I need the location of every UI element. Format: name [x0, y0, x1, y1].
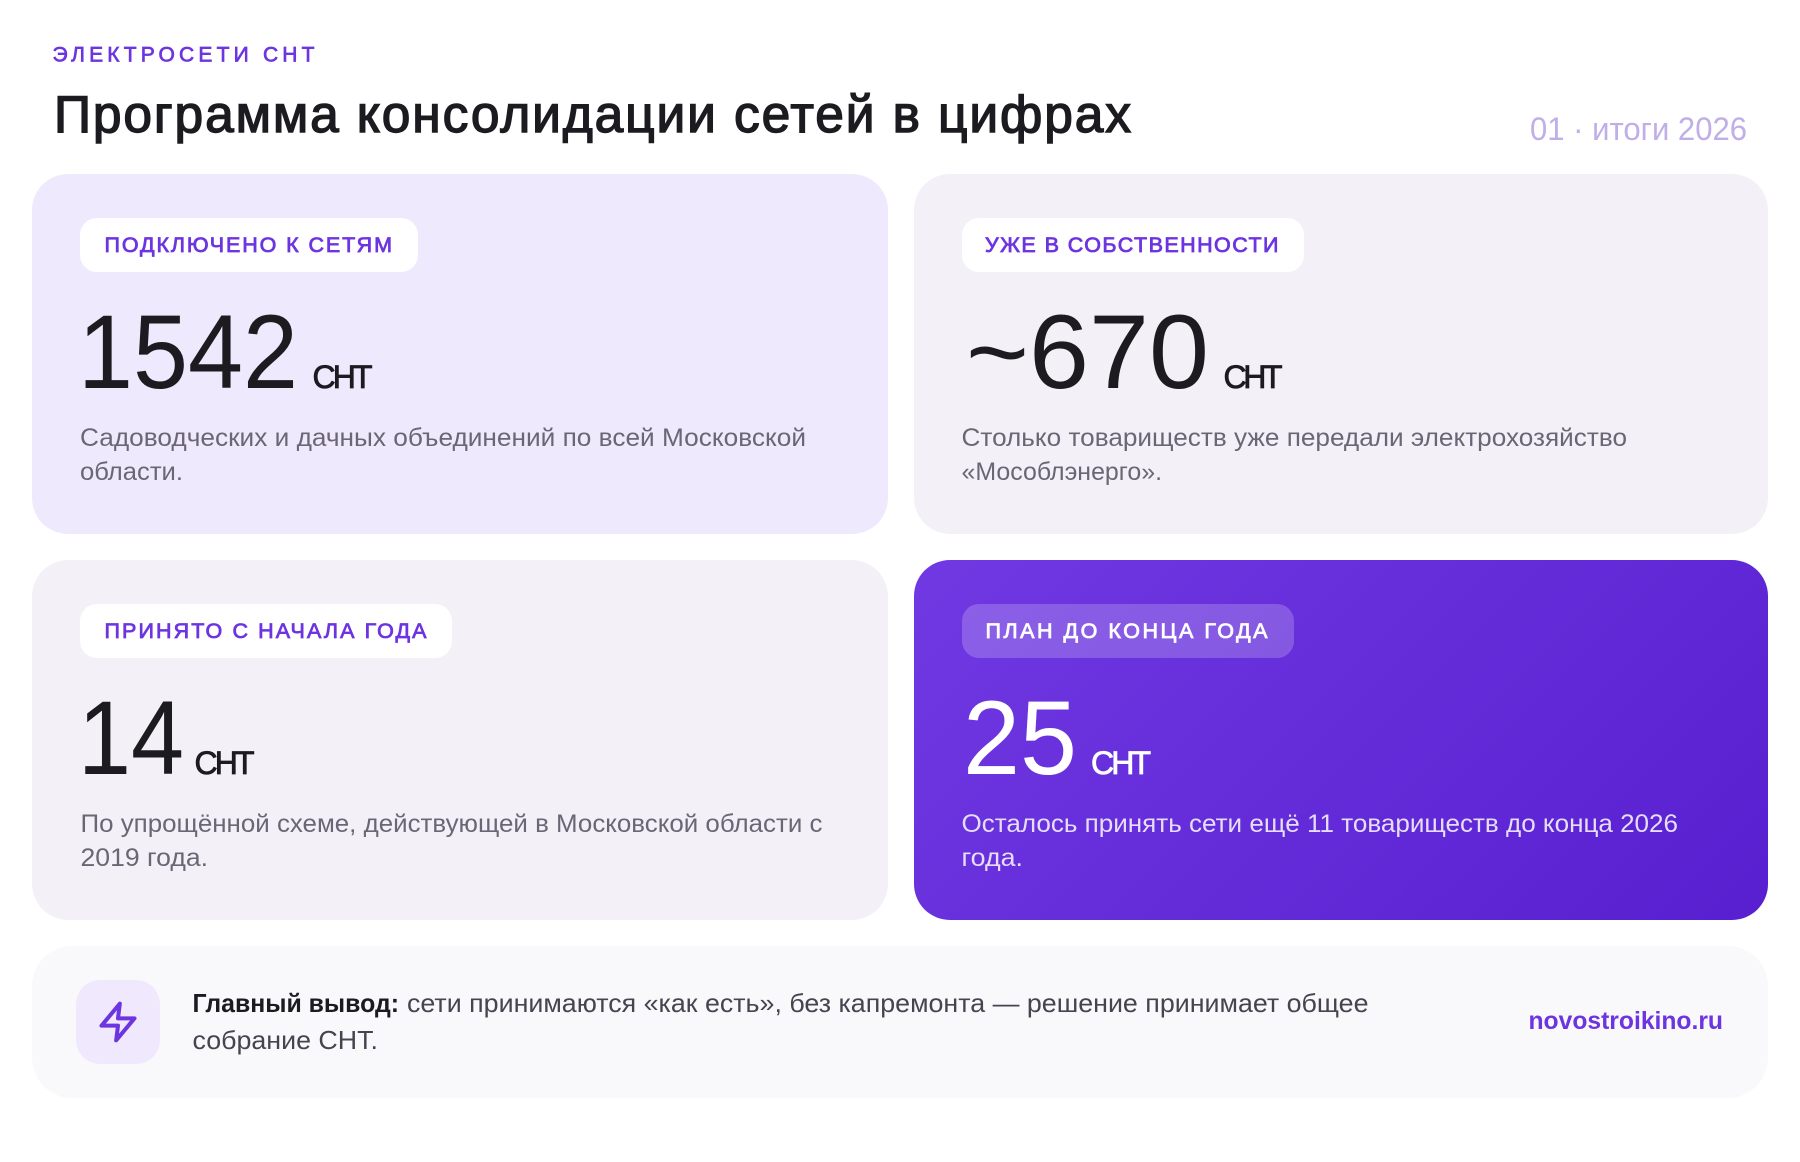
badge: plan: [962, 604, 1294, 658]
badge: accepted: ПРИНЯТО С НАЧАЛА ГОДА: [104, 619, 427, 643]
eyebrow: ЭЛЕКТРОСЕТИ СНТ: [52, 44, 315, 66]
description: [80, 810, 823, 872]
panel: plan until year end: [914, 560, 1768, 920]
description: Осталось принять сети ещё 11 товариществ до конца 2026: [962, 810, 1678, 838]
description: области.: [80, 458, 183, 486]
badge: owned: УЖЕ В СОБСТВЕННОСТИ: [985, 233, 1278, 257]
panel: owned: [914, 174, 1768, 534]
icon: lightning bolt: [76, 980, 160, 1064]
badge: owned: [962, 218, 1304, 272]
title: Программа консолидации сетей в цифрах: [54, 85, 1131, 143]
description: Садоводческих и дачных объединений по всей Московской: [80, 424, 806, 452]
unit: СНТ: [194, 745, 254, 781]
takeaway text: собрание СНТ.: [192, 1025, 378, 1055]
date label: 01 · итоги 2026: [1530, 111, 1747, 147]
description: [962, 810, 1678, 872]
unit: СНТ: [1091, 745, 1151, 781]
panel: key takeaway: [32, 946, 1768, 1098]
panel: connected: [32, 174, 888, 534]
takeaway text: сети принимаются «как есть», без капремонта — решение принимает общее: [407, 988, 1368, 1018]
badge: connected: ПОДКЛЮЧЕНО К СЕТЯМ: [104, 233, 392, 257]
description: 2019 года.: [80, 844, 208, 872]
number: 1542: 1542: [78, 294, 298, 411]
description: [962, 424, 1627, 486]
description: «Мособлэнерго».: [962, 458, 1162, 486]
description: По упрощённой схеме, действующей в Московской области с: [80, 810, 823, 838]
description: [80, 424, 806, 486]
description: Столько товариществ уже передали электрохозяйство: [962, 424, 1627, 452]
description: года.: [962, 844, 1023, 872]
badge: accepted: [80, 604, 452, 658]
number: ~670: ~670: [966, 294, 1209, 411]
site link: novostroikino.ru: [1528, 1007, 1723, 1035]
takeaway text: Главный вывод:: [192, 988, 399, 1018]
takeaway text: [192, 988, 1368, 1055]
badge: connected: [80, 218, 418, 272]
unit: СНТ: [312, 359, 372, 395]
unit: СНТ: [1224, 359, 1282, 395]
number: 25: 25: [963, 680, 1077, 797]
panel: accepted this year: [32, 560, 888, 920]
badge: plan: ПЛАН ДО КОНЦА ГОДА: [986, 619, 1268, 643]
number: 14: 14: [78, 680, 184, 797]
